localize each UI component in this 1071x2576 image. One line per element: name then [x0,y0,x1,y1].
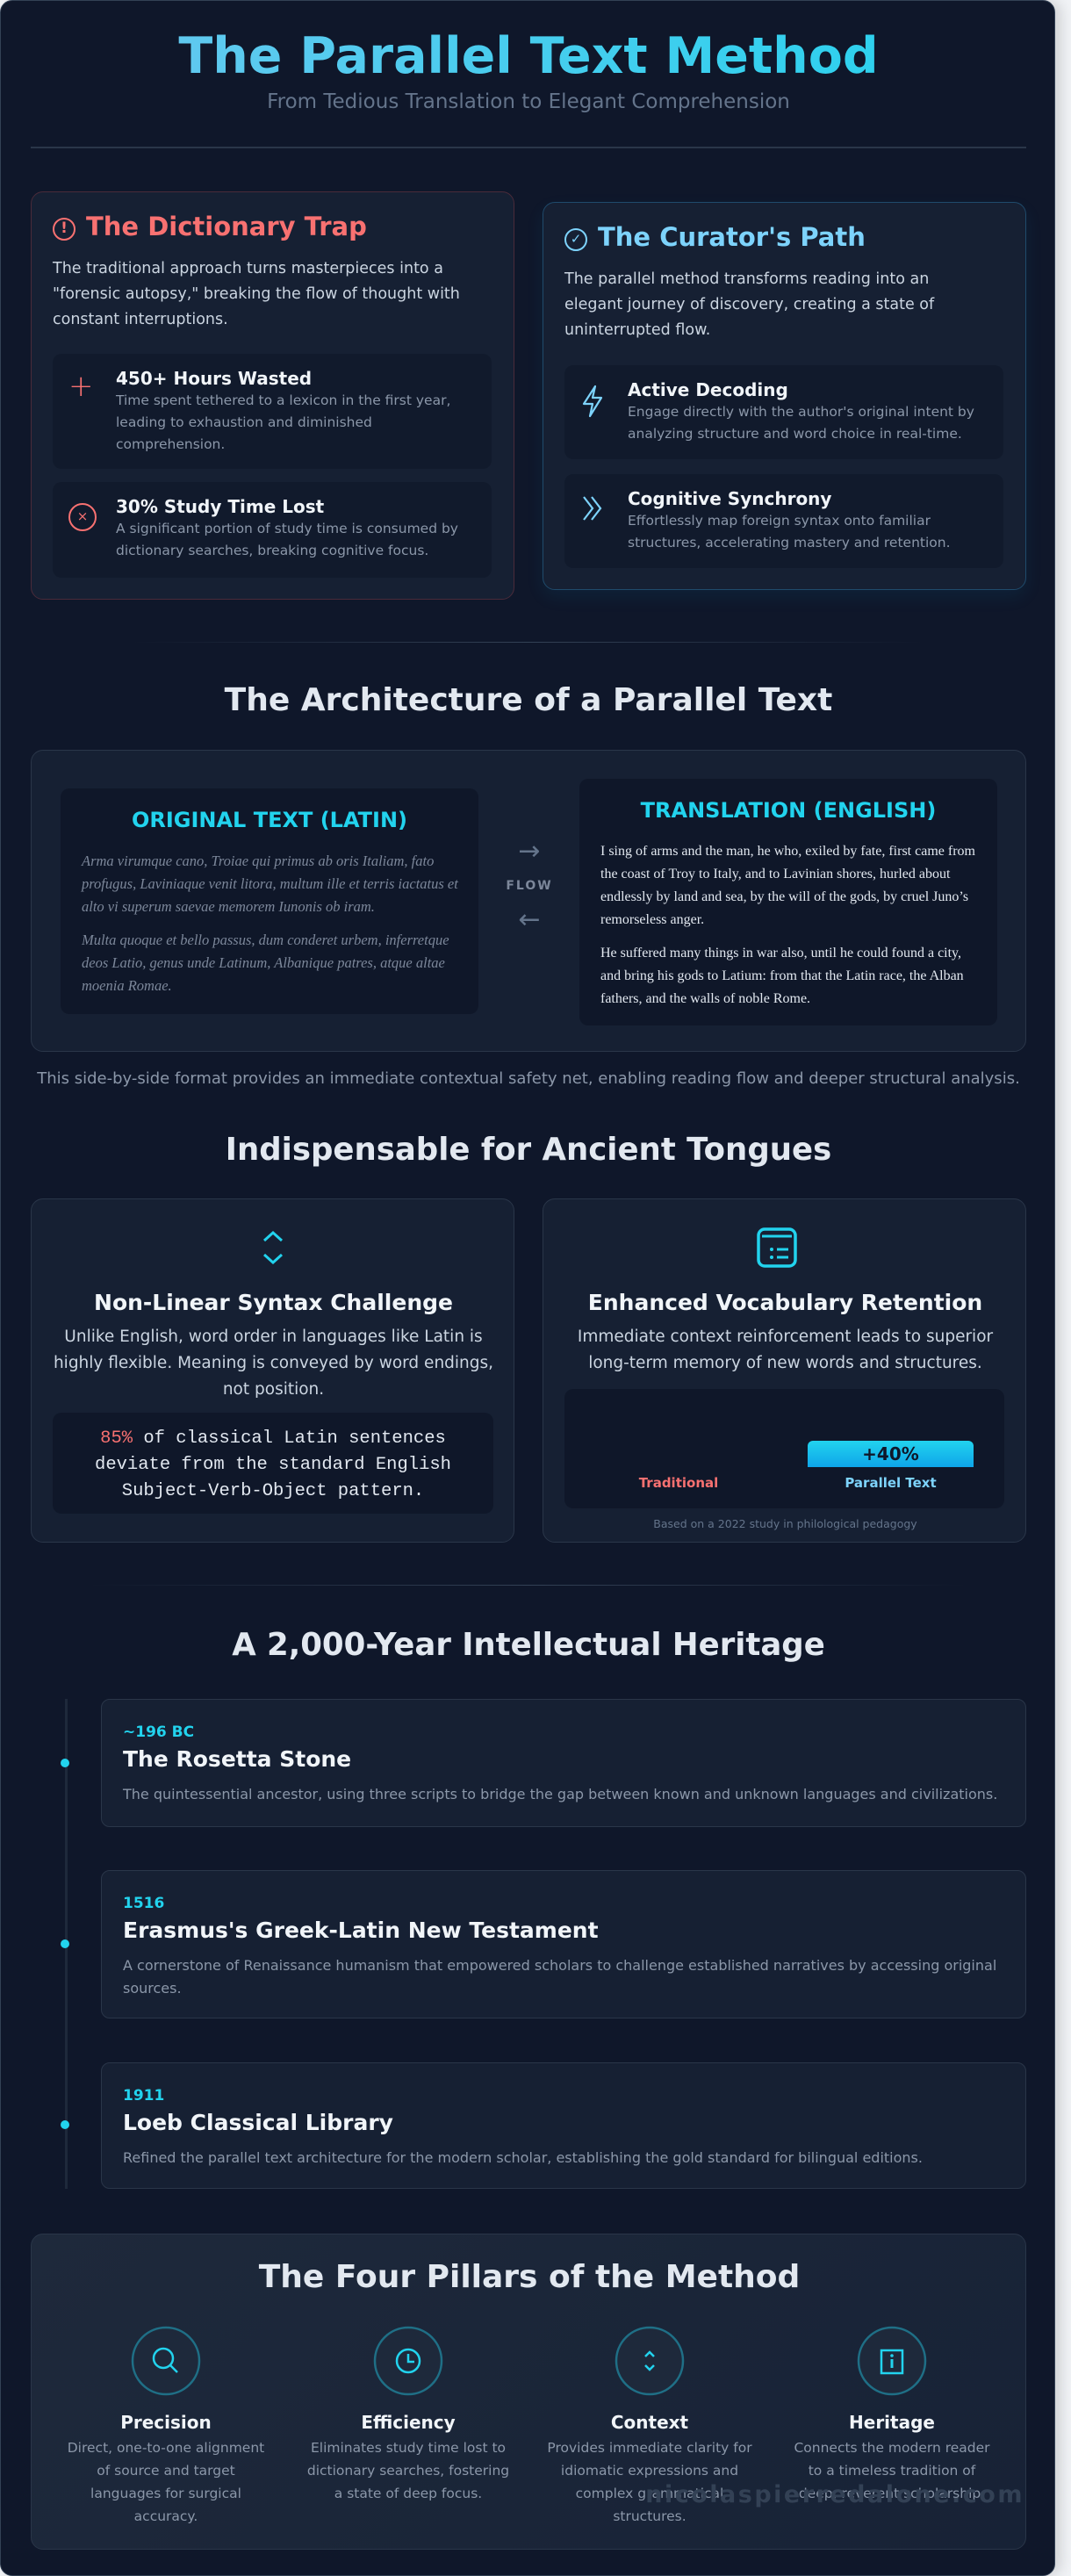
benefit: active decoding: Engage directly with the author's original intent by analyzing structure and word choice in real-time. [628,404,974,442]
box: english translation: TRANSLATION (ENGLISH) [641,798,936,823]
box: original latin [61,788,478,1014]
heading: ancient tongues: Indispensable for Ancient Tongues [226,1132,831,1168]
timeline item: loeb: Loeb Classical Library [123,2110,393,2135]
benefit: cognitive synchrony: Effortlessly map foreign syntax onto familiar structures, accelerating mastery and retention. [628,513,951,550]
icon: lightning [583,385,602,418]
panel: four pillars [31,2234,1026,2550]
pillar: efficiency: Eliminates study time lost to dictionary searches, fostering a state of deep focus. [307,2440,509,2501]
icon: magnifier [132,2327,200,2395]
timeline [61,1699,1026,2189]
pillar: context: Provides immediate clarity for idiomatic expressions and complex grammatical structures. [547,2440,752,2524]
text: curator intro: The parallel method transforms reading into an elegant journey of discovery, creating a state of uninterrupted flow. [564,270,934,339]
bar chart: Traditional [639,1475,718,1491]
title [1,25,1056,87]
stat: 85%: 85% of classical Latin sentences deviate from the standard English Subject-Verb-Object pattern. [95,1428,451,1501]
pillar: precision: Precision [120,2412,212,2433]
icon: double chevron [583,496,602,521]
pillar: efficiency [307,2327,509,2501]
benefit: active decoding [564,365,1003,459]
pillar: heritage: Connects the modern reader to a timeless tradition of deep, reverent scholarship. [794,2440,990,2501]
heading: dictionary trap: ! [61,219,68,237]
pillar: context [547,2327,752,2524]
subtitle: From Tedious Translation to Elegant Comprehension [267,90,790,113]
box: original latin: Arma virumque cano, Troiae qui primus ab oris Italiam, fato profugus, Laviniaque venit litora, multum ille et terris iactatus et alto vi superum saevae memorem Iunonis ob iram. Multa quoque et bello passus, dum conderet urbem, inferretque deos Latio, genus unde Latinum, Albanique patres, atque altae moenia Romae. [82,853,458,994]
bar: parallel text [808,1441,974,1467]
icon: chevrons [615,2327,685,2395]
panel: architecture [31,750,1026,1052]
arrows: flow [506,836,553,935]
box: original latin: ORIGINAL TEXT (LATIN) [132,808,407,832]
pillar: efficiency: Efficiency [361,2412,456,2433]
pillar: precision: Direct, one-to-one alignment of source and target languages for surgical accuracy. [68,2440,264,2524]
bar chart [564,1389,1004,1508]
icon: x circle [68,503,97,531]
benefit: cognitive synchrony [564,474,1003,568]
card: non-linear syntax [31,1198,514,1543]
timeline item: rosetta: The quintessential ancestor, using three scripts to bridge the gap between known and unknown languages and civilizations. [123,1786,997,1802]
bar chart: Parallel Text [845,1475,937,1491]
stat: 30% time lost: A significant portion of study time is consumed by dictionary searches, breaking cognitive focus. [116,521,458,558]
timeline item: loeb [61,2062,1026,2189]
panel: curator's path [543,202,1026,590]
arrows: flow: → [518,836,541,867]
timeline item: erasmus: A cornerstone of Renaissance humanism that empowered scholars to challenge established narratives by accessing original sources. [123,1957,996,1997]
heading: curator's path: The Curator's Path [598,222,866,252]
heading: dictionary trap: The Dictionary Trap [86,212,367,241]
card: vocabulary retention: Immediate context reinforcement leads to superior long-term memory of new words and structures. [578,1328,993,1372]
icon: clock [374,2327,442,2395]
box: english translation [579,779,997,1025]
heading: curator's path: ✓ [571,231,581,247]
panel: dictionary trap [31,191,514,600]
timeline item: rosetta: The Rosetta Stone [123,1746,351,1772]
pillar: heritage: Heritage [849,2412,935,2433]
timeline item: loeb: 1911 [123,2087,164,2105]
stat: 450+ hours [53,354,492,469]
timeline item: rosetta: ~196 BC [123,1723,194,1741]
timeline item: erasmus [61,1870,1026,2018]
stat: 450+ hours: 450+ Hours Wasted [116,368,312,389]
stat: 30% time lost [53,482,492,578]
watermark: nicolaspierredalone.com [645,2481,1024,2508]
box: english translation: I sing of arms and the man, he who, exiled by fate, first came from the coast of Troy to Italy, and to Lavinian shores, hurled about endlessly by land and sea, by the will of the gods, by cruel Juno’s remorseless anger. He suffered many things in war also, until he could found a city, and bring his gods to Latium: from that the Latin race, the Alban fathers, and the walls of noble Rome. [600,844,975,1006]
heading: architecture: The Architecture of a Parallel Text [225,682,832,718]
icon: x circle: × [77,508,88,524]
caption: architecture: This side-by-side format provides an immediate contextual safety net, enabling reading flow and deeper structural analysis. [37,1069,1020,1088]
text: dictionary intro: The traditional approach turns masterpieces into a "forensic autopsy," breaking the flow of thought with constant interruptions. [53,260,460,328]
pillar: precision [68,2327,264,2524]
arrows: flow: ← [518,904,541,935]
timeline item: erasmus: 1516 [123,1895,164,1912]
card: vocabulary retention: Based on a 2022 study in philological pedagogy [653,1517,917,1530]
pillar: heritage [794,2327,990,2501]
title: The Parallel Text Method [178,27,879,85]
arrows: flow: FLOW [506,879,553,893]
stat: 450+ hours: Time spent tethered to a lexicon in the first year, leading to exhaustion and diminished comprehension. [116,392,450,452]
timeline item: rosetta [61,1699,1026,1827]
stat: 30% time lost: 30% Study Time Lost [116,496,324,517]
stat: 85% [53,1413,493,1514]
bar: parallel text: +40% [862,1443,919,1464]
card: vocabulary retention [543,1198,1026,1543]
icon: up down chevrons [263,1231,283,1264]
card: vocabulary retention: Enhanced Vocabulary Retention [588,1290,982,1315]
heading: heritage: A 2,000-Year Intellectual Heritage [232,1627,825,1663]
icon: card list [757,1227,797,1268]
timeline item: loeb: Refined the parallel text architecture for the modern scholar, establishing the gold standard for bilingual editions. [123,2149,923,2166]
benefit: cognitive synchrony: Cognitive Synchrony [628,488,831,509]
card: non-linear syntax: Non-Linear Syntax Challenge [94,1290,453,1315]
icon: plus: + [68,369,93,404]
timeline item: erasmus: Erasmus's Greek-Latin New Testament [123,1918,599,1943]
icon: info book [857,2327,927,2395]
benefit: active decoding: Active Decoding [628,379,788,400]
pillar: context: Context [611,2412,688,2433]
card: non-linear syntax: Unlike English, word order in languages like Latin is highly flexible. Meaning is conveyed by word endings, not position. [54,1328,493,1399]
panel: four pillars: The Four Pillars of the Method [259,2259,800,2295]
